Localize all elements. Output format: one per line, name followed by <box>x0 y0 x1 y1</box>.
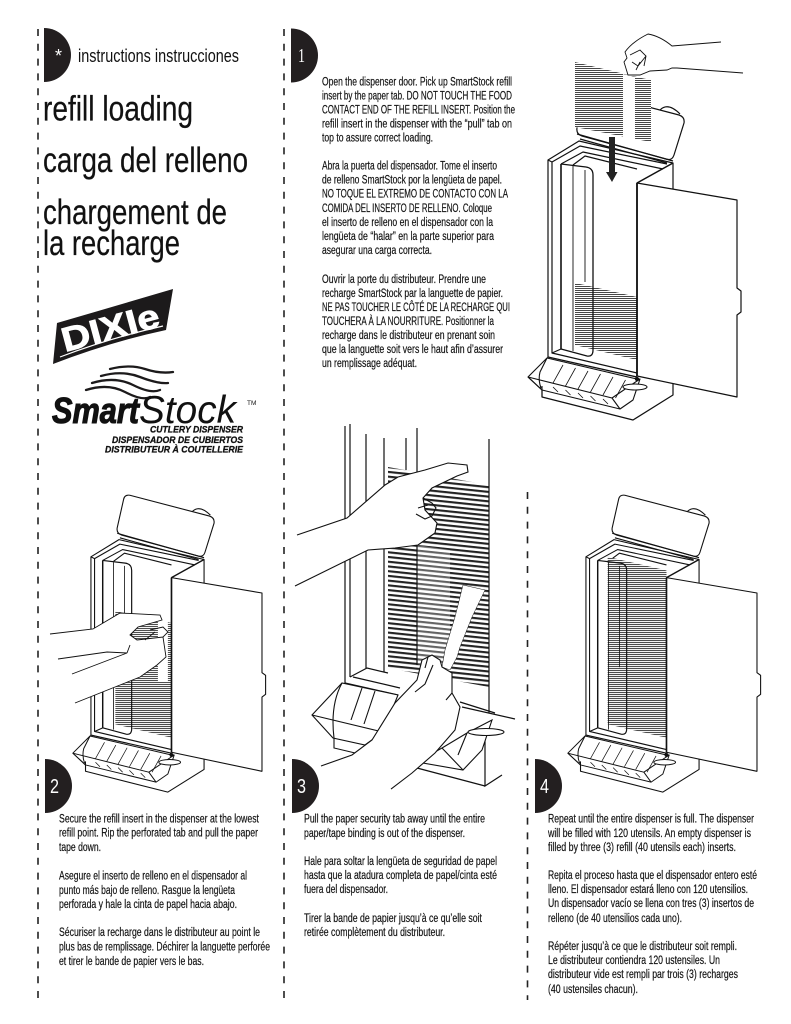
text block: step 1 instructions: COMIDA DEL INSERTO DE RELLENO. Coloque <box>322 203 492 215</box>
text block: step 1 instructions: Open the dispenser door. Pick up SmartStock refill <box>322 76 512 88</box>
text block: step 2 instructions: Asegure el inserto de relleno en el dispensador al <box>59 871 247 883</box>
dashed column divider: middle <box>283 29 285 1000</box>
illustration: step 4 full dispenser <box>568 495 761 792</box>
text block: step 4 instructions: Le distributeur contiendra 120 ustensiles. Un <box>548 955 720 967</box>
text block: step 3 instructions: hasta que la atadura completa de papel/cinta esté <box>304 870 497 882</box>
text block: step 3 instructions: Hale para soltar la lengüeta de seguridad de papel <box>304 856 497 868</box>
text block: step 4 instructions: Répéter jusqu’à ce que le distributeur soit rempli. <box>548 941 737 953</box>
text block: step 2 instructions: Secure the refill insert in the dispenser at the lowest <box>59 814 260 826</box>
title: refill loading in three languages: refill loading <box>43 90 193 128</box>
logo caption: cutlery dispenser <box>105 425 244 456</box>
text block: step 1 instructions: NO TOQUE EL EXTREMO DE CONTACTO CON LA <box>322 188 508 200</box>
title: refill loading in three languages <box>43 90 248 263</box>
logo: SmartStock wordmark: Stock <box>139 389 238 432</box>
logo caption: cutlery dispenser: DISTRIBUTEUR À COUTELLERIE <box>105 445 244 456</box>
refill insert held above dispenser <box>575 62 651 142</box>
badge: step 2: 2 <box>50 776 59 798</box>
hands ripping perforated tab <box>50 613 168 703</box>
text block: step 2 instructions: et tirer le bande de papier vers le bas. <box>59 956 204 968</box>
logo: SmartStock wordmark <box>52 389 256 432</box>
text block: step 1 instructions: de relleno SmartStock por la lengüeta de papel. <box>322 174 502 186</box>
logo: Dixie badge <box>53 289 173 364</box>
text block: step 3 instructions: retirée complètement du distributeur. <box>304 927 445 939</box>
badge: step 1 <box>291 28 318 82</box>
text block: step 3 instructions <box>304 814 497 939</box>
text block: step 1 instructions <box>322 76 515 370</box>
dashed column divider: right <box>526 492 528 1000</box>
text block: step 1 instructions: TOUCHERA À LA NOURRITURE. Positionner la <box>322 315 494 328</box>
text block: step 1 instructions: asegurar una carga correcta. <box>322 245 432 257</box>
dashed column divider: left <box>37 29 39 1000</box>
text block: step 2 instructions: perforada y hale la cinta de papel hacia abajo. <box>59 899 237 911</box>
text block: step 1 instructions: que la languette soit vers le haut afin d’assurer <box>322 344 503 356</box>
badge: step 4: 4 <box>540 776 549 798</box>
badge: step 3: 3 <box>297 776 306 798</box>
text block: step 1 instructions: CONTACT END OF THE REFILL INSERT. Position the <box>322 104 515 116</box>
text block: step 1 instructions: el inserto de relleno en el dispensador con la <box>322 217 493 229</box>
illustration: step 2 dispenser with hands at refill <box>50 495 266 792</box>
lower hand pulling tape <box>321 655 460 789</box>
text block: step 2 instructions <box>59 814 270 968</box>
badge: step 4 <box>535 759 562 813</box>
text block: step 1 instructions: NE PAS TOUCHER LE CÔTÉ DE LA RECHARGE QUI <box>322 301 510 314</box>
logo caption: cutlery dispenser: DISPENSADOR DE CUBIERTOS <box>112 435 244 446</box>
text block: step 2 instructions: plus bas de remplissage. Déchirer la languette perforée <box>59 942 270 954</box>
refill insert hatch close-up <box>388 467 489 687</box>
text block: step 4 instructions <box>547 814 757 996</box>
title: refill loading in three languages: chargement de <box>43 193 227 232</box>
text block: step 1 instructions: refill insert in the dispenser with the “pull” tab on <box>322 118 512 130</box>
text block: step 2 instructions: refill point. Rip the perforated tab and pull the paper <box>59 828 258 840</box>
text block: step 2 instructions: Sécuriser la recharge dans le distributeur au point le <box>59 927 260 939</box>
logo: SmartStock waves <box>86 366 173 398</box>
text block: step 4 instructions: filled by three (3) refill (40 utensils each) inserts. <box>548 842 736 854</box>
title: refill loading in three languages: carga del relleno <box>43 141 248 180</box>
illustration: step 1 dispenser with refill being inserted <box>528 34 743 420</box>
badge: step 3 <box>292 759 319 813</box>
heading: instructions instrucciones: instructions instrucciones <box>78 45 239 66</box>
badge: asterisk instructions <box>44 28 71 82</box>
arrow: down into dispenser <box>606 137 618 182</box>
upper hand on refill <box>295 463 468 586</box>
text block: step 1 instructions: lengüeta de “halar” en la parte superior para <box>322 231 494 243</box>
badge: step 1: 1 <box>298 45 305 67</box>
dispensing tray <box>312 683 504 770</box>
text block: step 3 instructions: fuera del dispensador. <box>304 884 388 896</box>
text block: step 1 instructions: top to assure correct loading. <box>322 132 433 144</box>
text block: step 2 instructions: tape down. <box>59 842 101 854</box>
text block: step 3 instructions: Pull the paper security tab away until the entire <box>304 814 485 826</box>
badge: step 2 <box>45 759 72 813</box>
text block: step 4 instructions: (40 ustensiles chacun). <box>548 984 638 996</box>
logo: Dixie badge: DIXIe <box>57 297 164 360</box>
refill insert at bottom of dispenser <box>575 283 637 360</box>
text block: step 1 instructions: Abra la puerta del dispensador. Tome el inserto <box>322 160 497 172</box>
logo: SmartStock wordmark: TM <box>247 400 256 407</box>
logo: SmartStock wordmark: Smart <box>52 390 141 431</box>
text block: step 1 instructions: Ouvrir la porte du distributeur. Prendre une <box>322 274 486 286</box>
text block: step 1 instructions: un remplissage adéquat. <box>322 358 417 370</box>
text block: step 2 instructions: punto más bajo de relleno. Rasgue la lengüeta <box>59 885 235 897</box>
text block: step 1 instructions: insert by the paper tab. DO NOT TOUCH THE FOOD <box>322 90 512 102</box>
text block: step 1 instructions: recharge SmartStock par la languette de papier. <box>322 288 503 300</box>
hand holding paper tab <box>624 34 743 75</box>
text block: step 3 instructions: Tirer la bande de papier jusqu’à ce qu’elle soit <box>304 913 483 925</box>
text block: step 4 instructions: relleno (de 40 utensilios cada uno). <box>548 913 682 925</box>
title: refill loading in three languages: la recharge <box>43 224 180 263</box>
text block: step 1 instructions: recharge dans le distributeur en prenant soin <box>322 330 495 342</box>
illustration: step 3 close-up of pulling the paper tape <box>295 424 515 789</box>
logo caption: cutlery dispenser: CUTLERY DISPENSER <box>150 425 243 436</box>
text block: step 3 instructions: paper/tape binding is out of the dispenser. <box>304 828 465 840</box>
dispenser frame lines <box>345 424 515 786</box>
paper tape being pulled <box>442 585 485 670</box>
badge: asterisk instructions: * <box>55 46 62 66</box>
